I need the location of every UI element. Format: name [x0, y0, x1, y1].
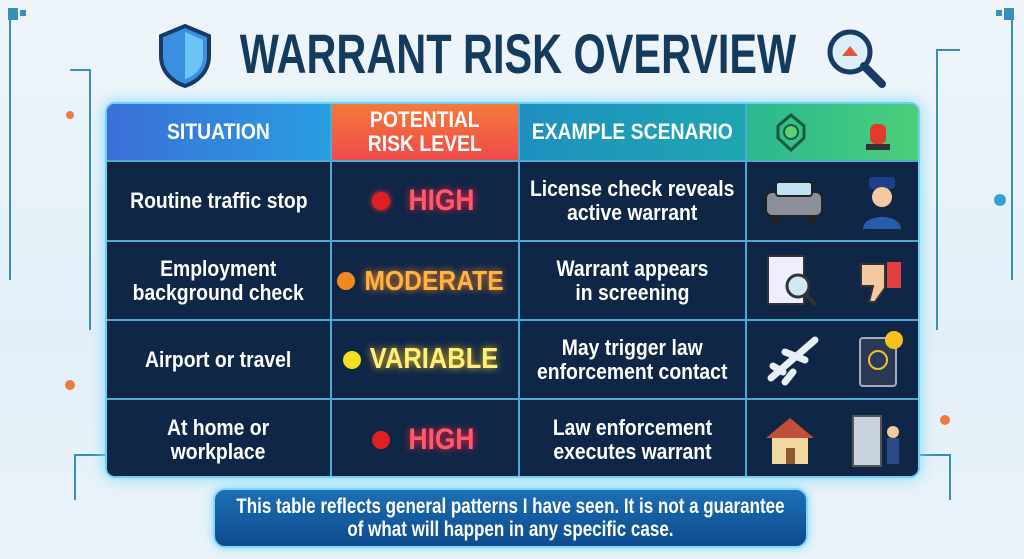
- table panel: executes warrant: [553, 439, 712, 464]
- table panel: License check reveals: [530, 176, 735, 201]
- footer note: of what will happen in any specific case.: [347, 518, 674, 541]
- header: example scenario: [520, 104, 747, 162]
- row 4: workplace: [171, 439, 266, 464]
- table panel: active warrant: [567, 200, 698, 225]
- row 2: background check: [133, 280, 304, 304]
- header: potential risk level: [332, 104, 520, 162]
- footer note: This table reflects general patterns I have seen. It is not a guarantee: [236, 495, 785, 518]
- row 2: Employment: [160, 256, 277, 280]
- table panel: enforcement contact: [537, 358, 728, 384]
- table panel: Warrant appears: [556, 256, 709, 280]
- row 3: [107, 321, 332, 400]
- icon: magnifier: [828, 30, 886, 88]
- header: example scenario: EXAMPLE SCENARIO: [532, 119, 733, 144]
- header: situation: SITUATION: [167, 119, 270, 144]
- row 4: [107, 400, 332, 480]
- table panel: [105, 102, 920, 478]
- table panel: MODERATE: [364, 264, 504, 296]
- header: icons: [747, 104, 922, 162]
- table panel: VARIABLE: [370, 343, 498, 375]
- table panel: May trigger law: [562, 334, 703, 360]
- title: WARRANT RISK OVERVIEW: [240, 22, 796, 84]
- row 4: At home or: [167, 415, 270, 440]
- table panel: in screening: [575, 280, 690, 304]
- icon: shield: [159, 24, 211, 88]
- footer note: [213, 488, 808, 548]
- row 1: [107, 162, 332, 242]
- row 3: Airport or travel: [145, 346, 292, 372]
- header: potential risk level: RISK LEVEL: [368, 131, 482, 156]
- header: potential risk level: POTENTIAL: [370, 107, 480, 132]
- table panel: HIGH: [408, 184, 474, 217]
- row 2: [107, 242, 332, 321]
- table panel: Law enforcement: [553, 415, 712, 440]
- table panel: HIGH: [408, 423, 474, 456]
- row 1: Routine traffic stop: [130, 188, 307, 213]
- header: situation: [107, 104, 332, 162]
